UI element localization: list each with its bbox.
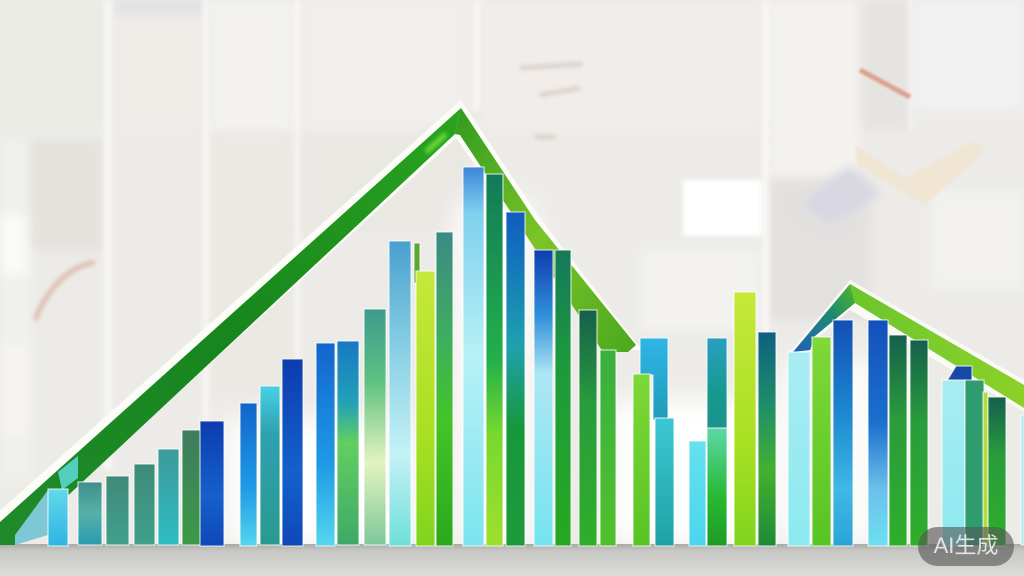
bar 9 — [260, 386, 280, 545]
reddish curve — [35, 262, 95, 320]
left arm of the arrow — [0, 108, 461, 545]
bar 30 — [788, 352, 810, 546]
vertical light stripes — [104, 0, 912, 470]
small marks — [520, 64, 582, 137]
bars: falling group — [534, 250, 674, 546]
bar 19 — [506, 212, 525, 546]
bar 17 — [463, 167, 484, 546]
roof halo — [790, 280, 1024, 412]
roof left slope — [793, 284, 855, 352]
bar 37 — [965, 380, 984, 546]
highlight at apex — [426, 134, 446, 152]
bar 36 cap — [945, 366, 972, 384]
bar 39 — [988, 397, 1006, 546]
cyan highlight on lower arm — [58, 456, 78, 490]
bar 16 — [436, 232, 453, 546]
large green triangle arrow — [0, 100, 642, 545]
bars: rising group — [48, 167, 525, 546]
beige folded shape — [855, 140, 985, 205]
bar 4 — [134, 464, 155, 545]
bar 25 — [633, 374, 650, 546]
bar 21 — [555, 250, 571, 546]
bar 23 — [600, 350, 616, 546]
bar 14 — [389, 241, 411, 546]
floor — [0, 544, 1024, 576]
bar 20 — [534, 250, 553, 546]
bar 36 — [942, 380, 965, 546]
bars: right group — [788, 320, 1024, 546]
bar 2 — [78, 482, 102, 545]
bar 22 — [579, 310, 597, 546]
lavender shadow shape — [800, 165, 880, 225]
roof right slope — [850, 284, 1024, 408]
small roof arrow — [790, 280, 1024, 412]
bar 34 — [889, 335, 907, 546]
white edge halo — [0, 100, 642, 540]
bar 6 — [182, 430, 201, 545]
reddish stroke — [860, 70, 910, 97]
bar 27 upper — [707, 338, 727, 433]
bar 5 — [158, 449, 179, 545]
arrow tail — [15, 490, 48, 545]
bar 32 — [833, 320, 853, 546]
bar 29 — [758, 332, 776, 546]
badge: AI生成 — [918, 527, 1014, 566]
right arm of the arrow — [455, 108, 636, 352]
bar 12 — [337, 341, 359, 545]
bar 3 — [106, 476, 129, 545]
bar 33 — [868, 320, 888, 546]
bars: middle group — [689, 292, 776, 546]
bar 18 — [486, 174, 503, 546]
bar 35 — [910, 340, 928, 546]
badge: AI生成: AI生成 — [934, 533, 998, 558]
bar 38 — [983, 392, 988, 546]
bar 8 — [240, 403, 257, 546]
bar 27 lower — [707, 428, 727, 546]
bar 28 — [734, 292, 756, 546]
glow behind bars — [225, 200, 910, 545]
bar 31 — [812, 337, 831, 546]
bar 13 — [364, 309, 386, 545]
bar 11 — [316, 343, 335, 546]
bar 7 — [200, 421, 224, 546]
bar 24 upper — [640, 338, 668, 420]
bar 26 — [689, 441, 706, 546]
bar 10 — [282, 359, 303, 546]
bar 15 — [416, 271, 435, 546]
bar 1 — [48, 489, 68, 546]
bar 40 — [1021, 415, 1024, 545]
bar 15 back — [414, 243, 420, 283]
bar 24 lower — [655, 418, 674, 546]
bright window — [683, 180, 762, 236]
